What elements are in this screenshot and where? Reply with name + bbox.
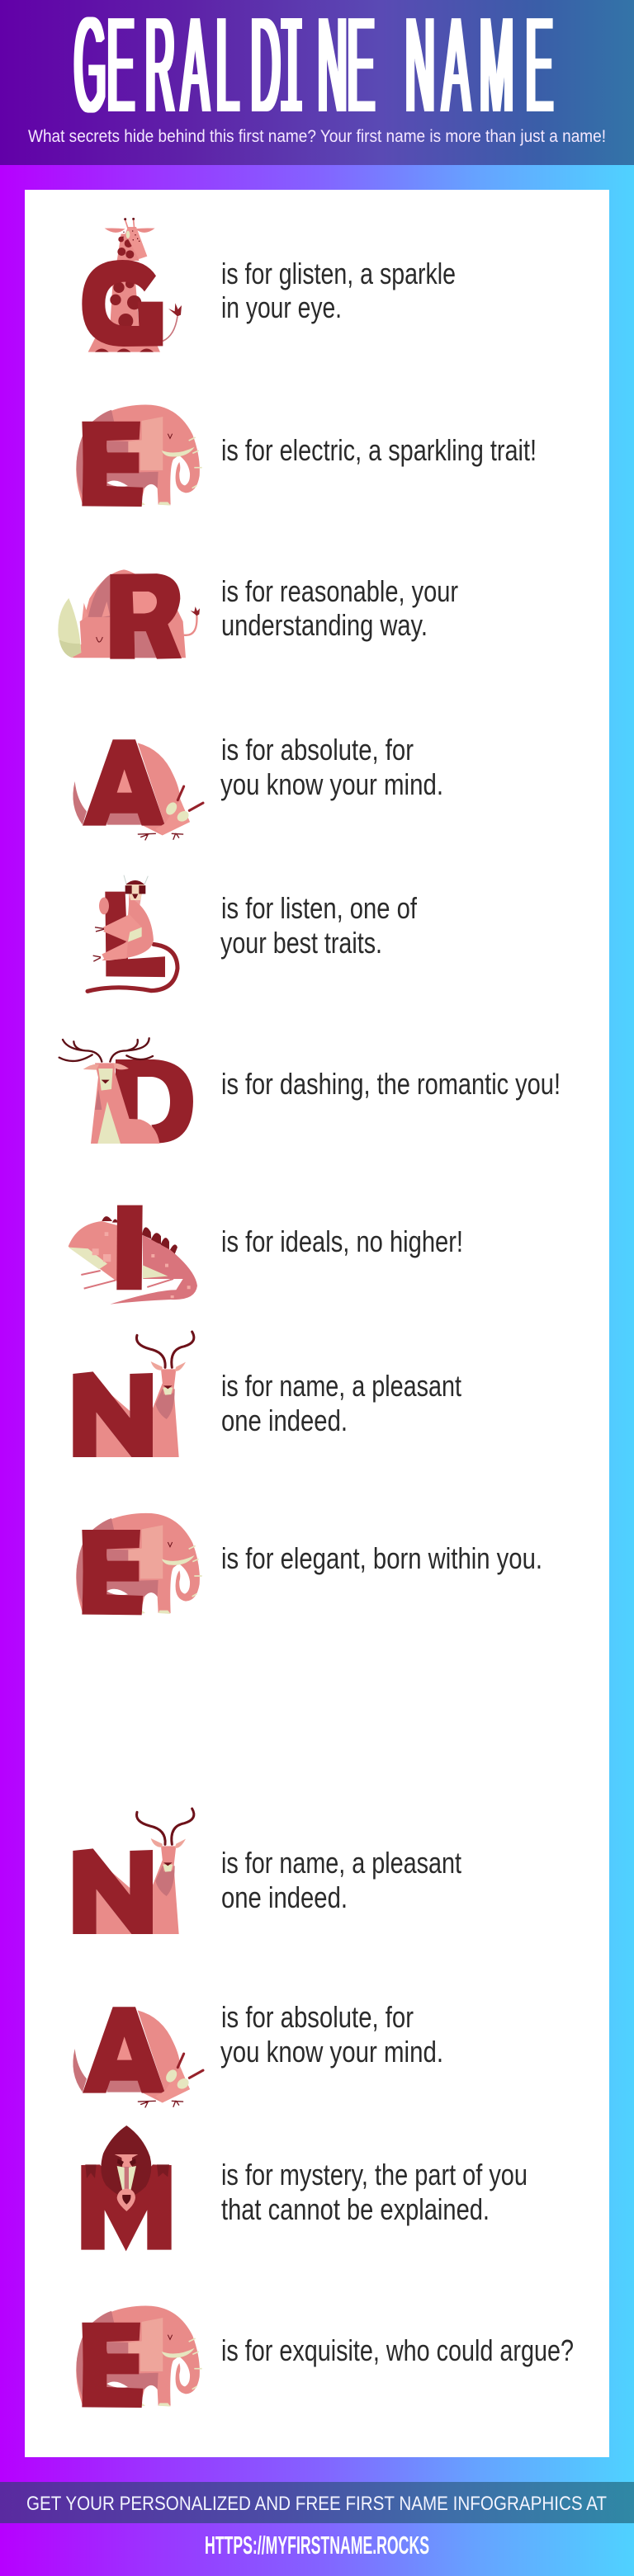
icon: elephant letter E: [76, 1513, 202, 1615]
text: I: is for ideals, no higher!: [221, 1224, 463, 1258]
row A second: [73, 2000, 443, 2107]
icon: elephant letter E: [76, 405, 202, 507]
row N second: [73, 1809, 461, 1934]
row E third: [76, 2306, 574, 2408]
text: A second: you know your mind.: [220, 2035, 443, 2069]
text: L: is for listen, one of: [221, 891, 418, 925]
text: A: is for absolute, for: [221, 733, 414, 767]
text: L: [220, 891, 418, 960]
text: A: you know your mind.: [220, 767, 443, 801]
icon: antelope letter N: [73, 1332, 194, 1457]
icon: mandrill letter M: [81, 2125, 172, 2251]
text: G: [221, 257, 456, 324]
row R: [58, 569, 458, 659]
text: R: is for reasonable, your: [221, 574, 458, 608]
text: A: [220, 733, 443, 801]
text: A second: [220, 2000, 443, 2069]
row N: [73, 1332, 461, 1457]
text: M: that cannot be explained.: [221, 2192, 490, 2226]
icon: giraffe letter G: [82, 218, 182, 352]
icon: elephant letter E: [76, 2306, 202, 2408]
text: G: is for glisten, a sparkle: [221, 257, 456, 290]
text: R: understanding way.: [221, 608, 428, 642]
icon: rhino letter R: [58, 569, 200, 659]
text: G: in your eye.: [221, 290, 342, 324]
row I: [69, 1205, 463, 1305]
row E: [76, 405, 537, 507]
icon: antelope letter N: [73, 1809, 194, 1934]
row L: [88, 875, 418, 991]
text: N second: [221, 1846, 461, 1914]
text: N: one indeed.: [221, 1404, 348, 1437]
text: M: [221, 2158, 528, 2226]
text: E: is for electric, a sparkling trait!: [221, 433, 537, 467]
footer band: [0, 2482, 634, 2523]
icon: deer letter D: [59, 1038, 193, 1144]
row E second: [76, 1513, 542, 1615]
row M: [81, 2125, 528, 2251]
text: R: [221, 574, 458, 642]
icon: monkey letter L: [88, 875, 177, 991]
text: D: is for dashing, the romantic you!: [221, 1067, 561, 1101]
row A: [73, 733, 443, 840]
row D: [59, 1038, 561, 1144]
text: M: is for mystery, the part of you: [221, 2158, 528, 2191]
footer link: HTTPS://MYFIRSTNAME.ROCKS: [205, 2531, 429, 2559]
text: L: your best traits.: [220, 926, 382, 960]
icon: armadillo letter A: [73, 2007, 203, 2107]
text: N second: is for name, a pleasant: [221, 1846, 461, 1880]
text: E second: is for elegant, born within you.: [221, 1541, 542, 1575]
row G: [82, 218, 456, 352]
header band: [0, 0, 634, 165]
text: N: [221, 1369, 461, 1437]
text: A second: is for absolute, for: [221, 2000, 414, 2034]
icon: armadillo letter A: [73, 739, 203, 840]
icon: iguana letter I: [69, 1205, 197, 1305]
text: N: is for name, a pleasant: [221, 1369, 461, 1403]
text: N second: one indeed.: [221, 1880, 348, 1914]
